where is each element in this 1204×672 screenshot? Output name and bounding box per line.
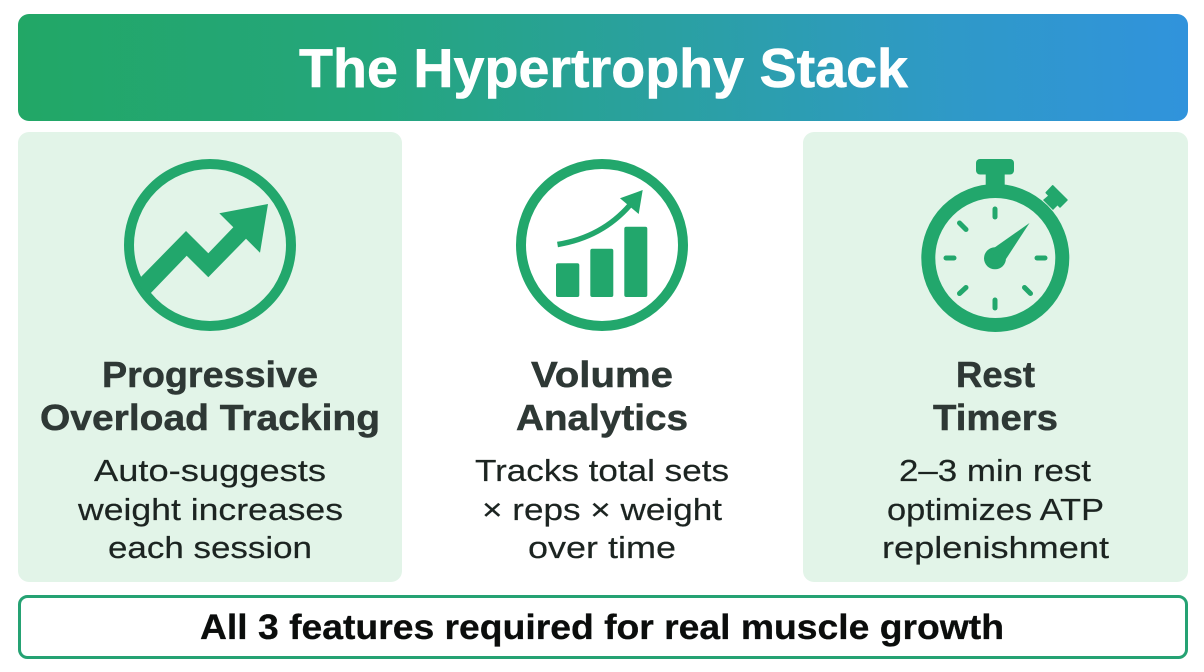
description: volume analytics: Tracks total sets (475, 453, 729, 488)
description: volume analytics (475, 453, 729, 565)
description: progressive overload tracking: each session (108, 530, 312, 565)
heading: rest timers: Rest (956, 354, 1035, 395)
description: progressive overload tracking: weight increases (77, 492, 343, 527)
panel: volume analytics (475, 164, 729, 565)
icon: bar chart with arrow in circle (521, 164, 683, 326)
description: volume analytics: over time (528, 530, 676, 565)
heading: rest timers: Timers (933, 397, 1058, 438)
description: rest timers: replenishment (882, 530, 1109, 565)
panel: progressive overload tracking (18, 132, 402, 582)
heading: volume analytics: Volume (531, 354, 673, 395)
heading: rest timers (933, 354, 1058, 438)
icon: rising arrow in circle (129, 164, 291, 326)
footer text: All 3 features required for real muscle growth (200, 608, 1004, 647)
heading: progressive overload tracking: Progressive (102, 354, 318, 395)
heading: progressive overload tracking (40, 354, 380, 438)
description: rest timers: optimizes ATP (887, 492, 1104, 527)
heading: volume analytics (516, 354, 688, 438)
description: rest timers: 2–3 min rest (899, 453, 1091, 488)
icon: stopwatch (928, 159, 1067, 325)
footer callout (20, 596, 1186, 658)
description: progressive overload tracking: Auto-suggests (94, 453, 326, 488)
title banner (18, 14, 1188, 121)
description: progressive overload tracking (77, 453, 343, 565)
description: volume analytics: × reps × weight (482, 492, 722, 527)
heading: progressive overload tracking: Overload Tracking (40, 397, 380, 438)
description: rest timers (882, 453, 1109, 565)
heading: volume analytics: Analytics (516, 397, 688, 438)
panel: rest timers (803, 132, 1188, 582)
title: The Hypertrophy Stack (299, 37, 908, 99)
